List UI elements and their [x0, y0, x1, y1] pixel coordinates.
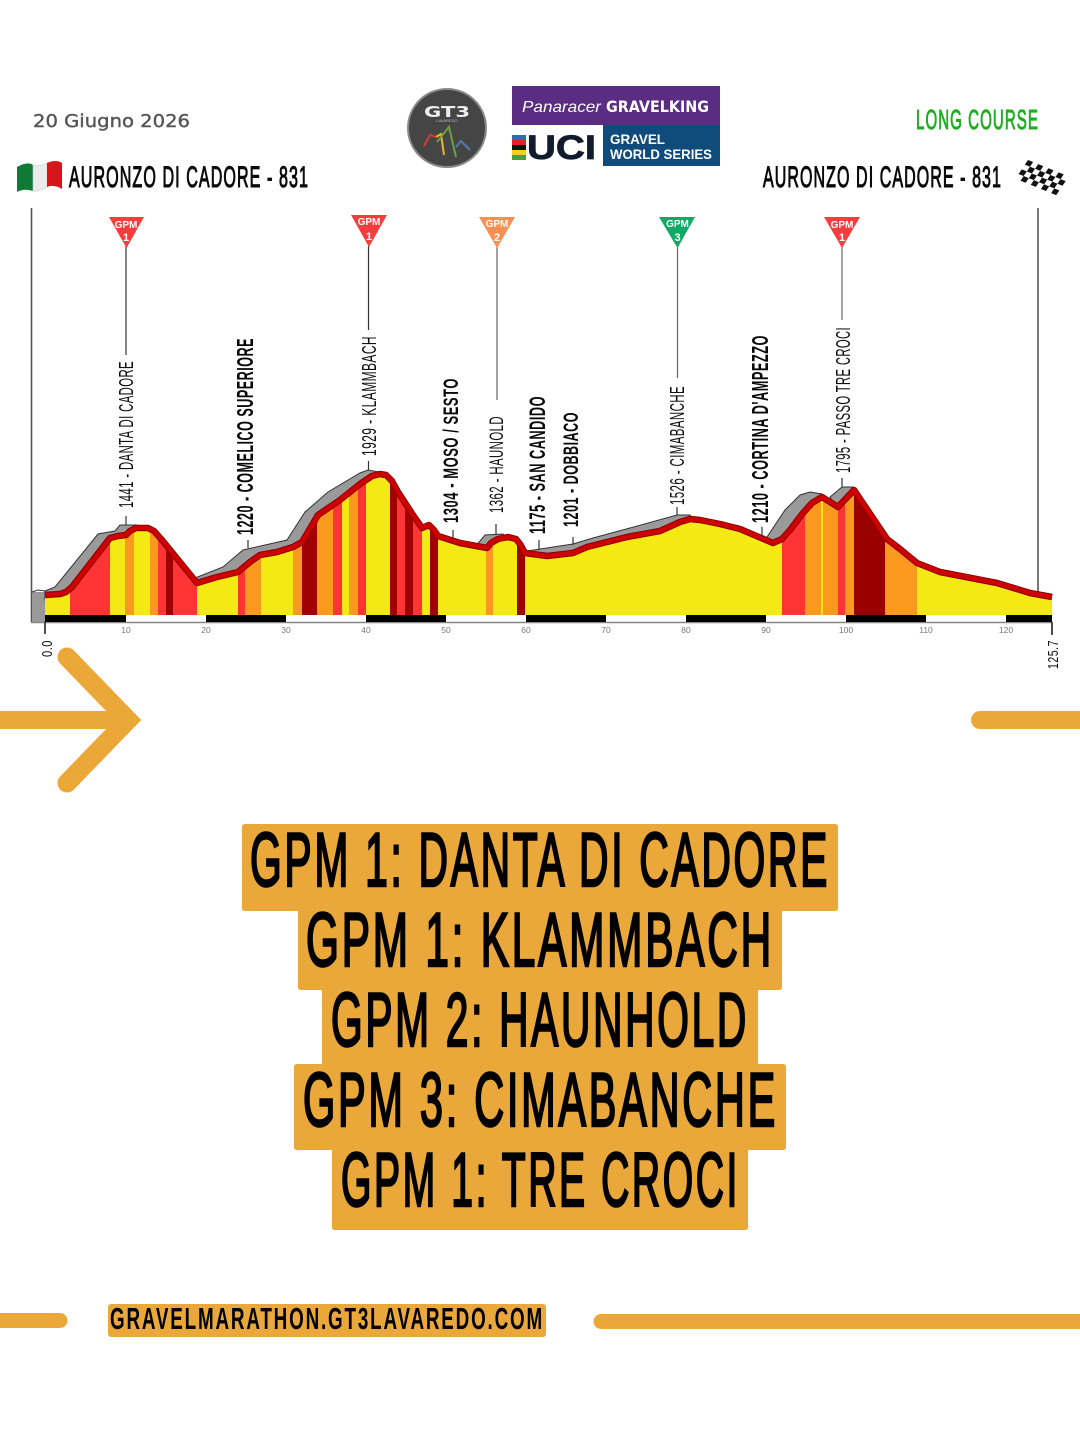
- GPM marker: Danta di Cadore: GPM: [115, 220, 137, 231]
- distance scale bar: 110: [919, 625, 933, 635]
- waypoint labels: 1795 - PASSO TRE CROCI: [833, 327, 855, 473]
- GPM marker: Cimabanche: [659, 217, 695, 248]
- waypoint labels: 1175 - SAN CANDIDO: [525, 396, 550, 534]
- logo: Panaracer Gravelking: GRAVELKING: [606, 97, 709, 116]
- GPM marker: Danta di Cadore: 1: [123, 232, 129, 244]
- distance scale bar: 50: [441, 625, 451, 635]
- distance scale bar: 80: [681, 625, 691, 635]
- waypoint labels: 1362 - HAUNOLD: [487, 416, 508, 513]
- distance scale bar: 20: [201, 625, 211, 635]
- distance scale bar: 120: [999, 625, 1013, 635]
- logo: GT3 Lavaredo: LAVAREDO: [436, 118, 458, 123]
- road profile line: [45, 474, 1052, 597]
- distance scale bar: 40: [361, 625, 371, 635]
- GPM marker: Haunold: [479, 217, 515, 248]
- right dash: [971, 711, 1080, 729]
- waypoint labels: 1220 - COMELICO SUPERIORE: [232, 338, 258, 535]
- distance scale bar: 70: [601, 625, 611, 635]
- logo: GT3 Lavaredo: [408, 89, 486, 167]
- GPM marker: Tre Croci: [824, 217, 860, 248]
- start location: AURONZO DI CADORE - 831: [69, 161, 309, 194]
- waypoint labels: 1201 - DOBBIACO: [560, 412, 583, 527]
- waypoint labels: 1929 - KLAMMBACH: [359, 336, 381, 456]
- distance scale bar: 0.0: [39, 640, 56, 657]
- GPM marker: Klammbach: [351, 215, 387, 247]
- arrow: [0, 657, 128, 783]
- GPM marker: Danta di Cadore: [109, 217, 144, 248]
- GPM marker: Klammbach: 1: [366, 231, 372, 243]
- gradient colour bands: [45, 470, 1052, 615]
- GPM marker: Haunold: 2: [494, 232, 500, 244]
- distance scale bar: 60: [521, 625, 531, 635]
- logo: UCI Gravel World Series: UCI: [527, 129, 596, 167]
- logo: GT3 Lavaredo: GT3: [424, 103, 470, 121]
- logo: UCI Gravel World Series: [512, 125, 720, 167]
- leader lines: [126, 246, 842, 550]
- GPM marker: Klammbach: GPM: [358, 217, 380, 228]
- logo: UCI Gravel World Series: WORLD SERIES: [610, 146, 712, 162]
- logo: Panaracer Gravelking: [512, 86, 720, 125]
- GPM marker: Haunold: GPM: [486, 219, 508, 230]
- bottom right dash: [594, 1314, 1080, 1329]
- waypoint labels: [116, 327, 855, 535]
- distance scale bar: 10: [121, 625, 131, 635]
- icon: checkered flag: [1015, 160, 1069, 195]
- gray climb shading: [45, 470, 856, 600]
- date: 20 Giugno 2026: [33, 111, 190, 132]
- waypoint labels: 1304 - MOSO / SESTO: [440, 378, 463, 523]
- website: [108, 1301, 546, 1337]
- waypoint labels: 1441 - DANTA DI CADORE: [116, 361, 138, 508]
- waypoint labels: 1210 - CORTINA D'AMPEZZO: [747, 335, 773, 523]
- GPM marker: Cimabanche: 3: [674, 232, 681, 244]
- bottom left dash: [0, 1313, 68, 1328]
- distance scale bar: 100: [839, 625, 853, 635]
- distance scale bar: 30: [281, 625, 291, 635]
- distance scale bar: 90: [761, 625, 771, 635]
- logo: Panaracer Gravelking: Panaracer: [522, 99, 602, 116]
- elevation profile chart: [31, 208, 1062, 669]
- icon: Italian flag: [17, 161, 62, 192]
- GPM marker: Cimabanche: GPM: [666, 219, 689, 230]
- waypoint labels: 1526 - CIMABANCHE: [667, 386, 689, 505]
- website: GRAVELMARATHON.GT3LAVAREDO.COM: [110, 1301, 544, 1336]
- GPM marker: Tre Croci: 1: [839, 232, 845, 244]
- distance scale bar: [31, 615, 1062, 669]
- distance scale bar: 125.7: [1045, 640, 1062, 669]
- GPM climbs list: [242, 818, 838, 1230]
- GPM marker: Tre Croci: GPM: [831, 220, 853, 231]
- logo: UCI Gravel World Series: GRAVEL: [610, 131, 665, 147]
